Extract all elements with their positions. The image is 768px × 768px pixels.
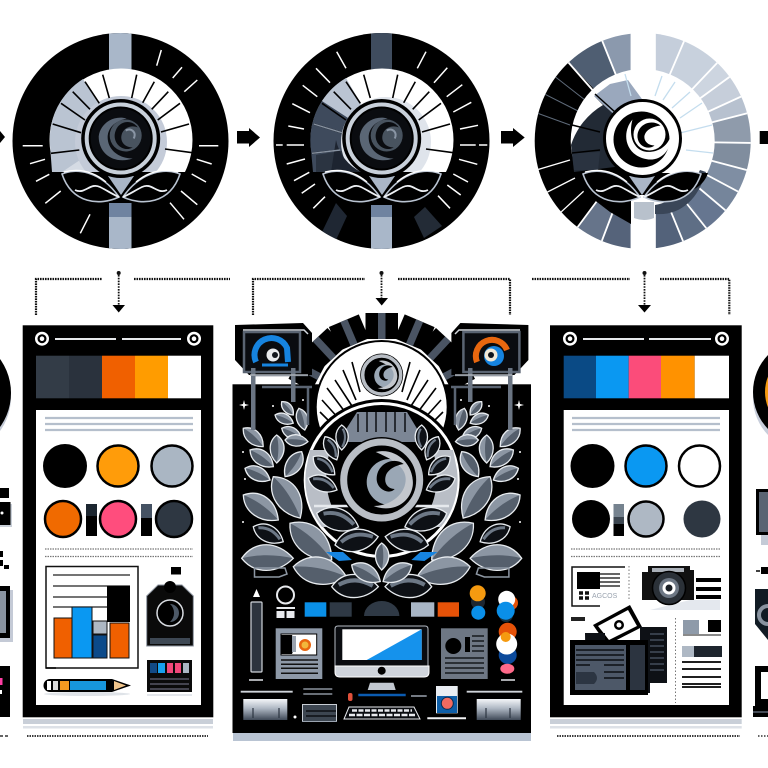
sparkles xyxy=(239,399,524,523)
cropped elements: left edge icons xyxy=(0,488,13,736)
colour dots xyxy=(470,585,518,680)
cropped element: left edge circle xyxy=(0,335,11,455)
icon: camera xyxy=(642,566,721,610)
document thumbnail: AGCOS xyxy=(592,593,618,600)
cropped element: right edge circle xyxy=(753,339,768,451)
icon: pencil xyxy=(44,679,131,696)
connector: to centre poster xyxy=(253,271,510,315)
main swirl emblem with ring xyxy=(301,399,463,561)
folder with documents and photo xyxy=(570,605,667,695)
document right xyxy=(441,628,488,679)
colour palette strip xyxy=(564,356,729,398)
right monitor badge xyxy=(451,323,528,430)
keyboard xyxy=(344,707,420,719)
icon: ring and blocks xyxy=(276,586,295,618)
bar chart xyxy=(46,566,138,668)
icon: pen xyxy=(249,589,263,680)
connector: to left panel xyxy=(36,271,230,315)
icon: swatch card xyxy=(147,660,192,696)
monitor xyxy=(335,626,429,690)
panel: left brand sheet xyxy=(23,325,213,736)
logo variant 2: dark ring with slate wedges xyxy=(274,30,490,252)
arrow: outgoing right edge xyxy=(760,131,768,144)
laurel leaves xyxy=(237,399,526,598)
arrow: variant 1 to 2 xyxy=(237,128,260,147)
colour swatch circles xyxy=(43,444,192,537)
sunburst rays xyxy=(288,313,475,391)
panel: right brand sheet xyxy=(550,325,742,736)
cropped elements: right edge icons xyxy=(753,489,768,736)
connector: to right panel xyxy=(532,271,729,315)
colour tiles xyxy=(305,601,459,617)
mouse card xyxy=(427,686,466,718)
colour swatch circles xyxy=(570,444,720,538)
panel: centre poster xyxy=(232,313,531,741)
colour palette strip xyxy=(36,356,201,398)
document thumbnail xyxy=(572,566,629,606)
left monitor badge xyxy=(235,323,312,430)
arrow: variant 2 to 3 xyxy=(501,128,525,147)
logo variant 1: dark ring with white centre xyxy=(12,30,228,252)
bottom desk items xyxy=(241,689,522,722)
document left xyxy=(276,628,322,679)
arrow: incoming left edge xyxy=(0,131,5,143)
layout column xyxy=(676,618,722,703)
upper emblem xyxy=(315,340,449,474)
icon: camera xyxy=(147,567,193,646)
logo variant 3: colour wheel of greys xyxy=(534,34,751,248)
